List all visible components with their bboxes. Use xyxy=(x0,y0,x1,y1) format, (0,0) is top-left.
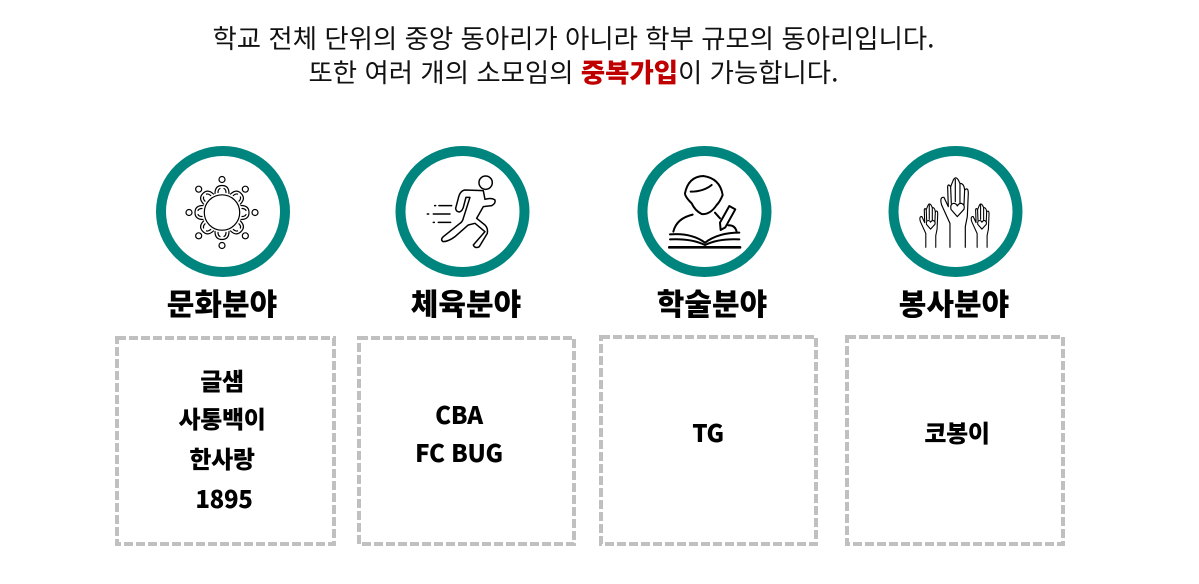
intro text: 학교 전체 단위의 중앙 동아리가 아니라 학부 규모의 동아리입니다. xyxy=(212,17,935,56)
panel: culture xyxy=(117,151,334,544)
heading: culture: 문화분야 xyxy=(167,280,277,324)
icon: raised hands with hearts xyxy=(894,151,1018,272)
icon: people around a table xyxy=(161,151,285,272)
intro text: 또한 여러 개의 소모임의 중복가입이 가능합니다. xyxy=(309,51,838,90)
icon: student writing xyxy=(642,151,766,272)
list box: culture clubs: 1895 xyxy=(195,480,253,515)
list box: culture clubs: 글샘 xyxy=(200,362,244,397)
heading: volunteer: 봉사분야 xyxy=(899,280,1009,324)
list box: culture clubs: 사통백이 xyxy=(178,400,266,435)
panel: sports xyxy=(359,151,574,544)
list box: volunteer clubs xyxy=(847,337,1063,544)
list box: sports clubs: CBA xyxy=(435,396,484,431)
list box: sports clubs xyxy=(359,338,574,544)
panel: volunteer xyxy=(847,151,1063,544)
intro text xyxy=(212,17,935,90)
list box: academic clubs xyxy=(601,337,816,544)
panel: academic xyxy=(601,151,816,544)
list box: culture clubs xyxy=(117,338,334,544)
list box: academic clubs: TG xyxy=(692,414,724,449)
icon: runner xyxy=(400,151,524,272)
heading: academic: 학술분야 xyxy=(657,280,767,324)
list box: culture clubs: 한사랑 xyxy=(189,440,255,475)
list box: sports clubs: FC BUG xyxy=(415,434,503,469)
heading: sports: 체육분야 xyxy=(411,280,521,324)
list box: volunteer clubs: 코봉이 xyxy=(924,414,990,449)
